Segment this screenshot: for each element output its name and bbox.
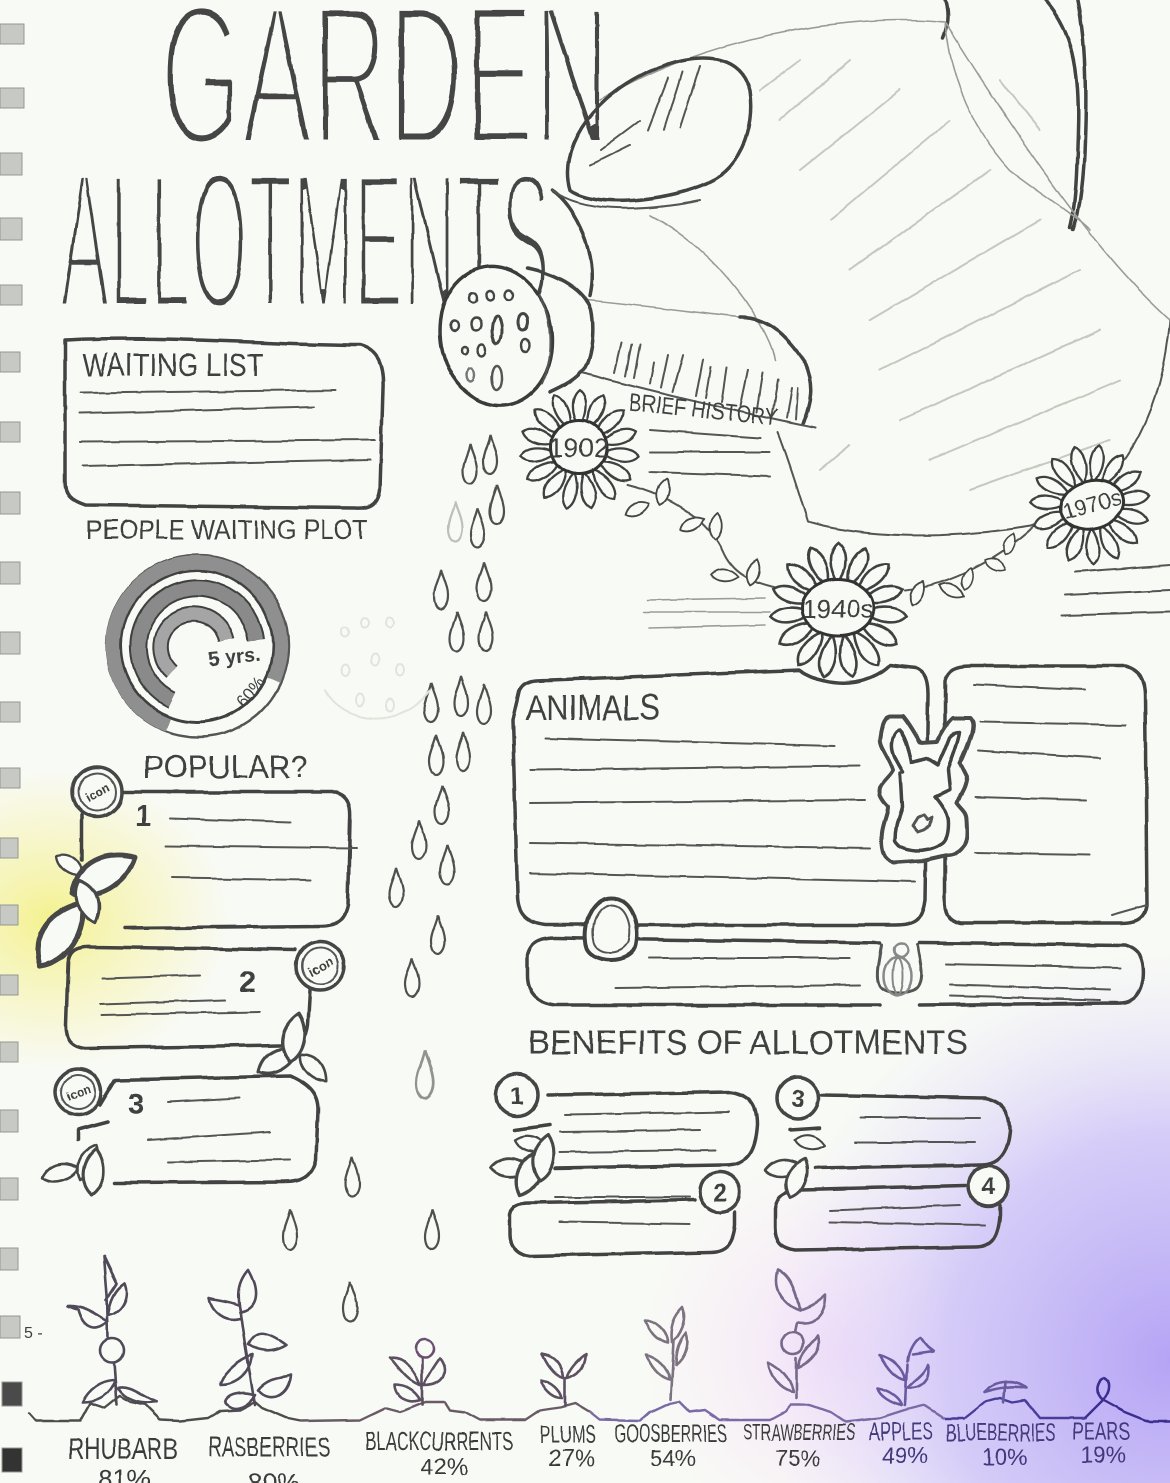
flower 1940s <box>770 542 906 678</box>
label: blackcurrents: BLACKCURRENTS <box>365 1426 513 1456</box>
label: rhubarb: RHUBARB <box>68 1433 178 1466</box>
vine 1940s to 1970s <box>905 520 1040 607</box>
can handle <box>943 0 1086 230</box>
plant: strawberries <box>768 1270 825 1398</box>
donut value: 5 yrs. <box>207 644 262 671</box>
panel: benefit 3 <box>777 1077 1010 1168</box>
text lines <box>1062 565 1170 615</box>
can opening <box>567 58 751 201</box>
flower 1970s: 1970s <box>1060 485 1124 524</box>
icon: leaves <box>40 1142 108 1196</box>
number 1: 1 <box>135 800 152 833</box>
number 3: 3 <box>128 1088 145 1121</box>
text lines <box>645 598 770 628</box>
label: rhubarb <box>68 1433 178 1483</box>
badge icon <box>55 1069 101 1115</box>
badge icon <box>72 767 122 817</box>
icon: leaves <box>253 1011 332 1088</box>
label: plums <box>540 1421 596 1471</box>
text lines <box>80 390 375 466</box>
badge icon <box>296 942 344 990</box>
can neck <box>552 190 592 296</box>
icon: benefit leaves right <box>765 1132 827 1201</box>
spout <box>587 300 740 317</box>
label: blackcurrents <box>365 1426 513 1481</box>
number 2: 2 <box>240 966 257 999</box>
label: pears: PEARS <box>1072 1418 1130 1446</box>
label: strawberries <box>743 1419 855 1471</box>
label: strawberries: STRAWBERRIES <box>743 1419 855 1445</box>
label: plums: 27% <box>549 1445 595 1471</box>
chart: plant growth <box>28 1256 1170 1483</box>
badge 3 <box>777 1077 819 1119</box>
badge 2: 2 <box>713 1180 727 1207</box>
label: pears: 19% <box>1080 1442 1126 1468</box>
icon: benefit leaves left <box>489 1131 559 1199</box>
watering can <box>429 0 1170 535</box>
flower 1970s <box>1016 432 1164 578</box>
label: raspberries <box>208 1431 330 1483</box>
icon: rabbit <box>879 717 973 862</box>
text lines <box>530 738 915 882</box>
heading: benefits: BENEFITS OF ALLOTMENTS <box>528 1024 968 1062</box>
panel: animals bar <box>527 898 1143 1005</box>
sprinkler rose <box>429 257 593 415</box>
label: blueberries: BLUEBERRIES <box>946 1419 1056 1447</box>
plant: gooseberries <box>645 1307 687 1400</box>
flower 1902: 1902 <box>549 433 609 463</box>
heading: popular: POPULAR? <box>143 749 308 785</box>
timeline: brief history <box>519 389 1170 678</box>
badge 1: 1 <box>510 1083 524 1110</box>
badge icon: icon <box>64 1082 92 1104</box>
margin tick mark: 5 - <box>24 1325 43 1342</box>
icon: egg <box>585 898 637 960</box>
label: blackcurrents: 42% <box>420 1454 468 1481</box>
label: raspberries: RASBERRIES <box>208 1431 330 1462</box>
panel: animals <box>513 665 928 925</box>
label: blueberries <box>946 1419 1056 1470</box>
ghost sprinkler imprint <box>325 617 430 718</box>
badge 4 <box>968 1166 1008 1206</box>
label: apples <box>869 1418 933 1468</box>
badge 2 <box>700 1172 740 1212</box>
panel: benefit 1 <box>496 1074 757 1168</box>
plant: blueberries <box>984 1382 1027 1402</box>
flower 1940s: 1940s <box>803 594 873 624</box>
panel: popular 3 <box>40 1069 318 1196</box>
label: apples: APPLES <box>869 1418 933 1446</box>
panel: benefit 4 <box>775 1166 1008 1250</box>
plant: raspberries <box>209 1270 291 1408</box>
panel: benefit 2 <box>510 1172 740 1256</box>
panel: waiting list <box>65 339 383 508</box>
can body <box>600 20 1170 360</box>
label: pears <box>1072 1418 1130 1468</box>
plant: pears <box>1097 1378 1109 1400</box>
badge icon: icon <box>305 953 336 980</box>
icon: seed pod <box>878 943 922 995</box>
spiral binding holes <box>0 24 24 1472</box>
panel: animals side box <box>945 666 1147 923</box>
label: apples: 49% <box>882 1442 928 1468</box>
plant: rhubarb <box>68 1256 156 1405</box>
flower 1902 <box>519 390 639 510</box>
panel: popular 2 <box>66 942 344 1088</box>
plant: blackcurrents <box>390 1339 445 1405</box>
title <box>60 0 610 350</box>
donut value: 60% <box>233 672 269 711</box>
caption: people waiting: PEOPLE WAITING PLOT <box>86 514 368 545</box>
badge 3: 3 <box>791 1086 805 1113</box>
water drops <box>283 435 504 1321</box>
heading: brief history: BRIEF HISTORY <box>627 389 779 432</box>
text lines <box>650 430 770 476</box>
label: gooseberries: 54% <box>650 1445 696 1471</box>
label: plums: PLUMS <box>540 1421 596 1449</box>
donut chart <box>107 555 289 737</box>
plant: apples <box>878 1338 933 1405</box>
badge icon: icon <box>82 779 113 806</box>
label: blueberries: 10% <box>982 1444 1028 1470</box>
plant: plums <box>541 1354 586 1405</box>
ground line <box>28 1396 1170 1422</box>
badge 4: 4 <box>981 1174 995 1201</box>
icon: leaves <box>23 844 143 974</box>
heading: waiting list: WAITING LIST <box>82 347 264 383</box>
heading: animals: ANIMALS <box>526 687 660 728</box>
panel: popular 1 <box>23 767 356 974</box>
label: gooseberries <box>615 1420 727 1471</box>
vine 1902 to 1940s <box>622 477 790 590</box>
label: gooseberries: GOOSBERRIES <box>615 1420 727 1448</box>
can shading <box>760 60 1120 490</box>
badge 1 <box>496 1074 538 1116</box>
label: strawberries: 75% <box>775 1445 821 1471</box>
